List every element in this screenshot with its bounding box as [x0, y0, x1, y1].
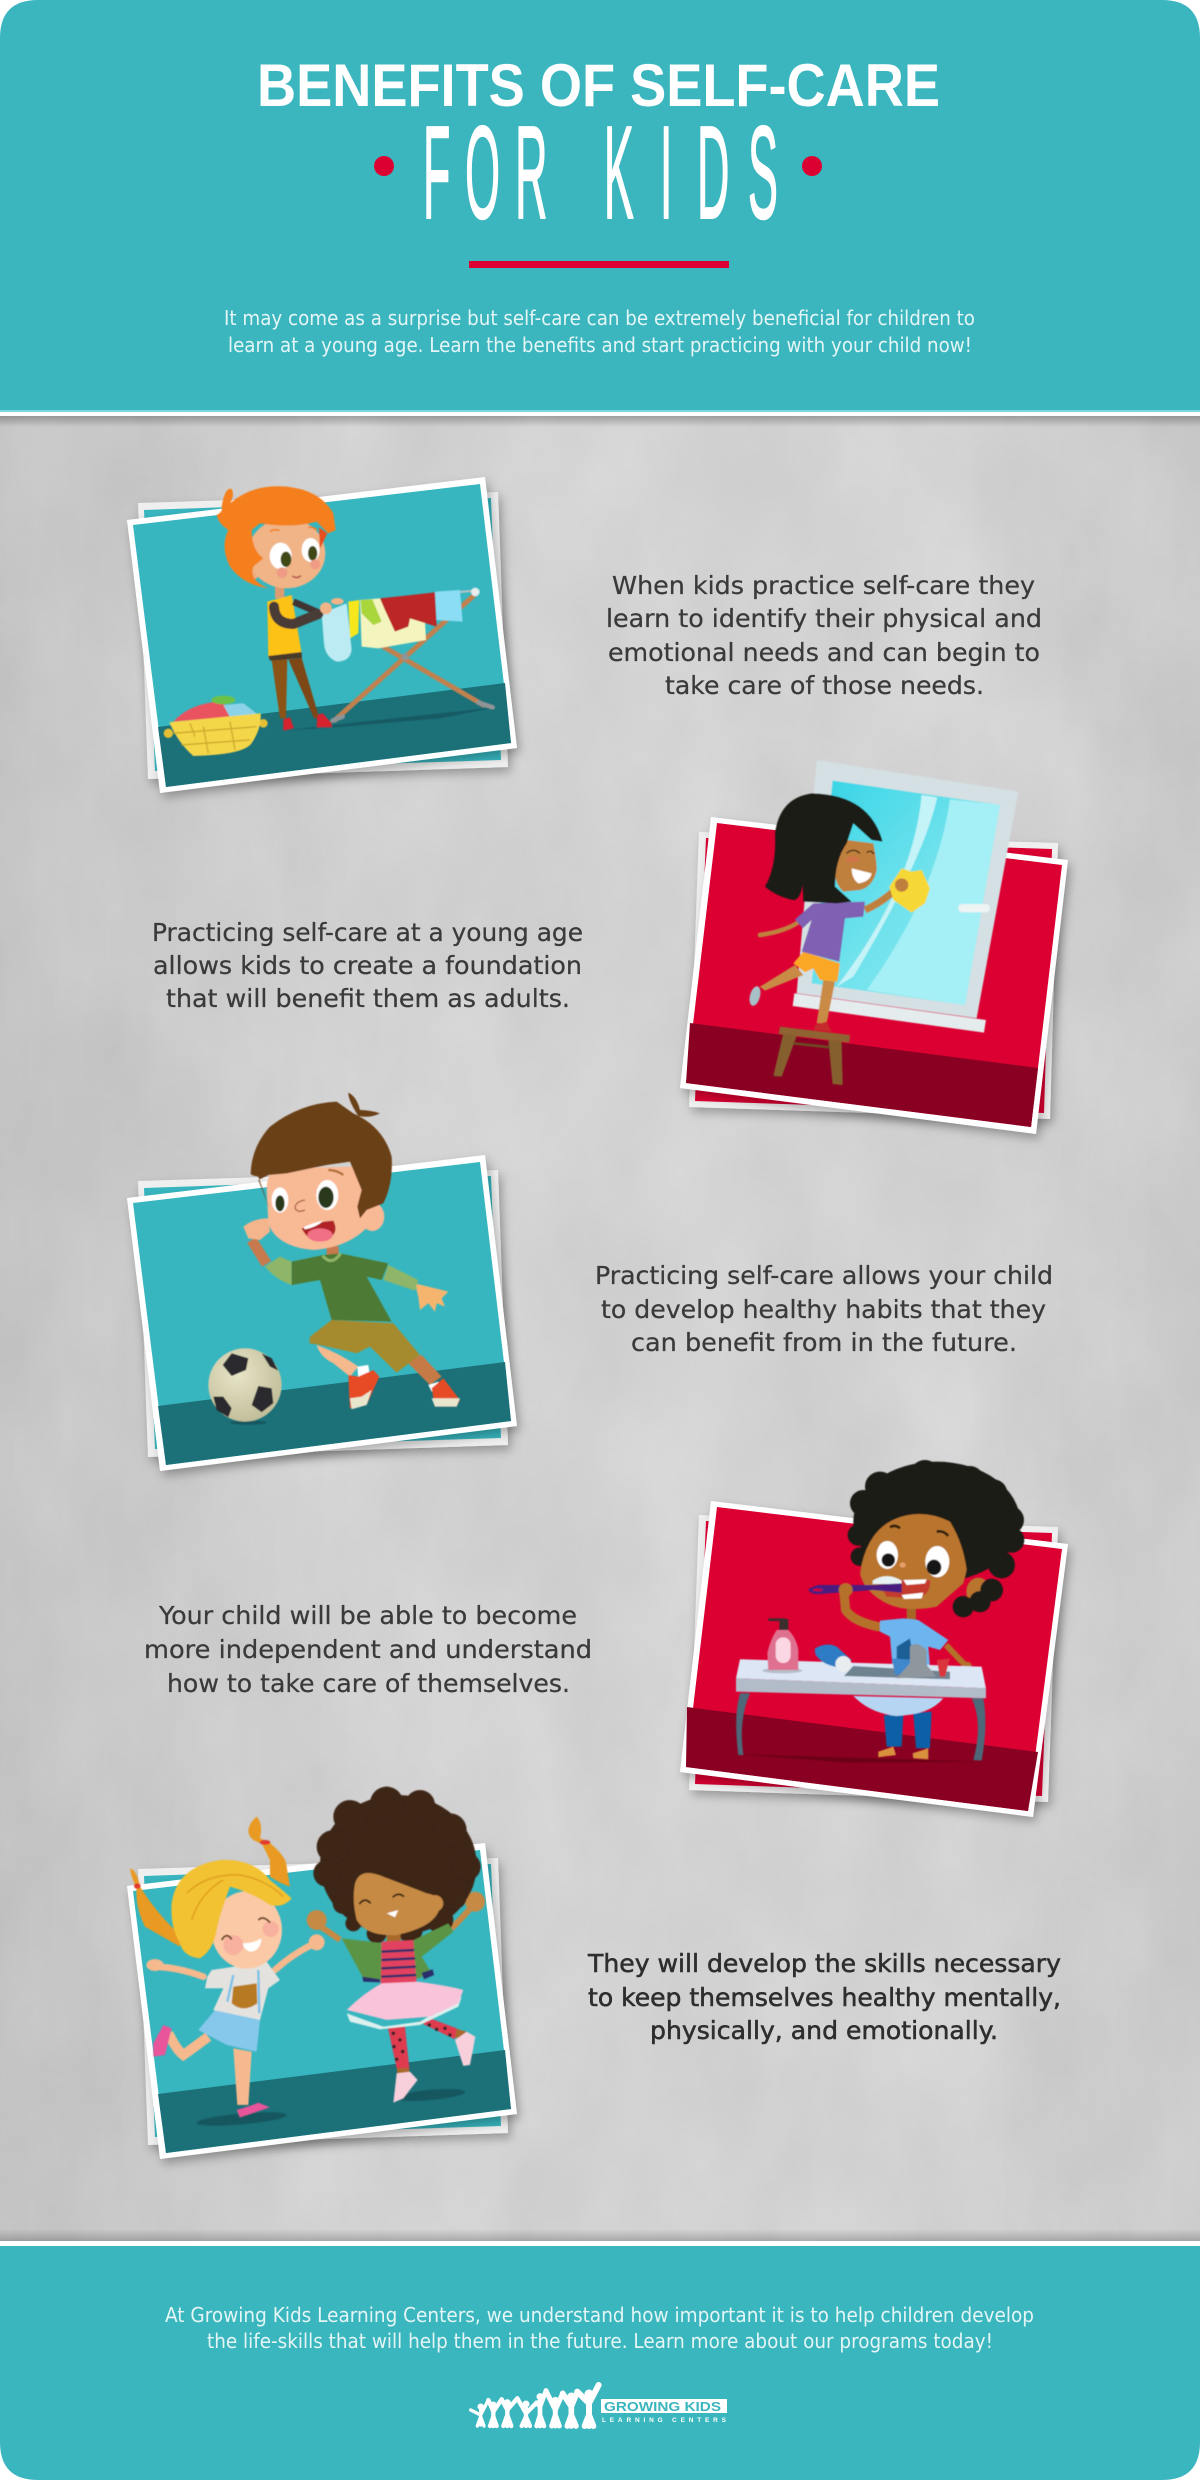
closing text: At Growing Kids Learning Centers, we understand how important it is to help children develop [165, 2303, 1034, 2327]
logo: Growing Kids Learning Centers [471, 2385, 727, 2426]
intro text: It may come as a surprise but self-care can be extremely beneficial for children to [224, 306, 975, 330]
back photo card [138, 1170, 508, 1457]
sink table [736, 1658, 986, 1761]
laundry basket [164, 696, 268, 756]
blonde girl [123, 1780, 325, 2117]
illustration: girl cleaning window [748, 760, 1018, 1085]
textured grey background [0, 410, 1200, 2250]
title: BENEFITS OF SELF-CARE [257, 52, 940, 119]
illustration: boy hanging laundry [164, 486, 497, 756]
sink items [762, 1618, 950, 1678]
panel: benefit 3 photo [127, 1093, 517, 1471]
text block: benefit 2: allows kids to create a foundation [153, 951, 582, 980]
text block: benefit 1 [606, 571, 1042, 700]
window [793, 760, 1018, 1033]
boy arms and shirt [844, 1593, 972, 1677]
front photo card [680, 817, 1068, 1134]
back photo card [138, 492, 508, 779]
footer panel [0, 2241, 1200, 2480]
text block: benefit 3: to develop healthy habits that they [601, 1295, 1046, 1324]
logo box [601, 2399, 727, 2413]
intro text: learn at a young age. Learn the benefits and start practicing with your child now! [228, 333, 972, 357]
text block: benefit 2: that will benefit them as adults. [166, 984, 570, 1013]
red dot left [374, 156, 394, 176]
text block: benefit 4: more independent and understand [144, 1635, 592, 1664]
illustration: boy playing soccer [208, 1093, 460, 1425]
intro text [224, 306, 975, 357]
front photo card [127, 477, 517, 793]
text block: benefit 2 [152, 918, 583, 1013]
text block: benefit 1: take care of those needs. [665, 671, 984, 700]
logo name: GROWING KIDS [604, 2399, 721, 2414]
text block: benefit 5: physically, and emotionally. [650, 2016, 998, 2045]
back photo card [138, 1858, 508, 2145]
illustration: boy brushing teeth [733, 1460, 1024, 1763]
closing text: the life-skills that will help them in the future. Learn more about our programs today! [207, 2329, 993, 2353]
text block: benefit 4: Your child will be able to become [158, 1601, 577, 1630]
red divider bar [469, 261, 729, 268]
text block: benefit 2: Practicing self-care at a young age [152, 918, 583, 947]
red dot right [802, 156, 822, 176]
panel: benefit 4 photo [680, 1460, 1068, 1817]
laundry [322, 590, 463, 662]
panel: benefit 5 photo [123, 1780, 517, 2159]
girl [748, 793, 930, 1032]
text block: benefit 5: to keep themselves healthy mentally, [588, 1983, 1061, 2012]
front photo card [127, 1843, 517, 2159]
illustration: two girls dancing [123, 1780, 485, 2128]
text block: benefit 5 [587, 1949, 1061, 2045]
text block: benefit 1: emotional needs and can begin to [608, 638, 1040, 667]
front photo card [680, 1501, 1068, 1817]
front photo card [127, 1155, 517, 1471]
back photo card [689, 832, 1058, 1119]
text block: benefit 3: Practicing self-care allows your child [595, 1261, 1053, 1290]
text block: benefit 4 [144, 1601, 592, 1698]
boy [217, 486, 344, 731]
logo tagline: LEARNING CENTERS [602, 2417, 727, 2424]
floor shadow [280, 707, 497, 731]
back photo card [689, 1515, 1058, 1802]
closing text [165, 2303, 1034, 2353]
curly-haired girl [307, 1787, 485, 2103]
text block: benefit 1: When kids practice self-care they [612, 571, 1035, 600]
boy lower body [733, 1712, 980, 1763]
boy head [808, 1460, 1024, 1617]
drying rack [333, 588, 493, 721]
panel: benefit 2 photo [680, 760, 1068, 1134]
text block: benefit 1: learn to identify their physical and [606, 604, 1042, 633]
stool [773, 1027, 850, 1085]
boy [243, 1093, 460, 1409]
panel: benefit 1 photo [127, 477, 517, 793]
subtitle: for kids: FOR KIDS [423, 99, 778, 246]
soccer ball [208, 1348, 282, 1425]
logo figures [471, 2385, 599, 2426]
floor shadows [196, 2087, 465, 2128]
text block: benefit 3: can benefit from in the future. [631, 1328, 1017, 1357]
text block: benefit 3 [595, 1261, 1053, 1357]
text block: benefit 4: how to take care of themselves. [167, 1669, 570, 1698]
header panel [0, 0, 1200, 416]
text block: benefit 5: They will develop the skills necessary [587, 1949, 1061, 1978]
